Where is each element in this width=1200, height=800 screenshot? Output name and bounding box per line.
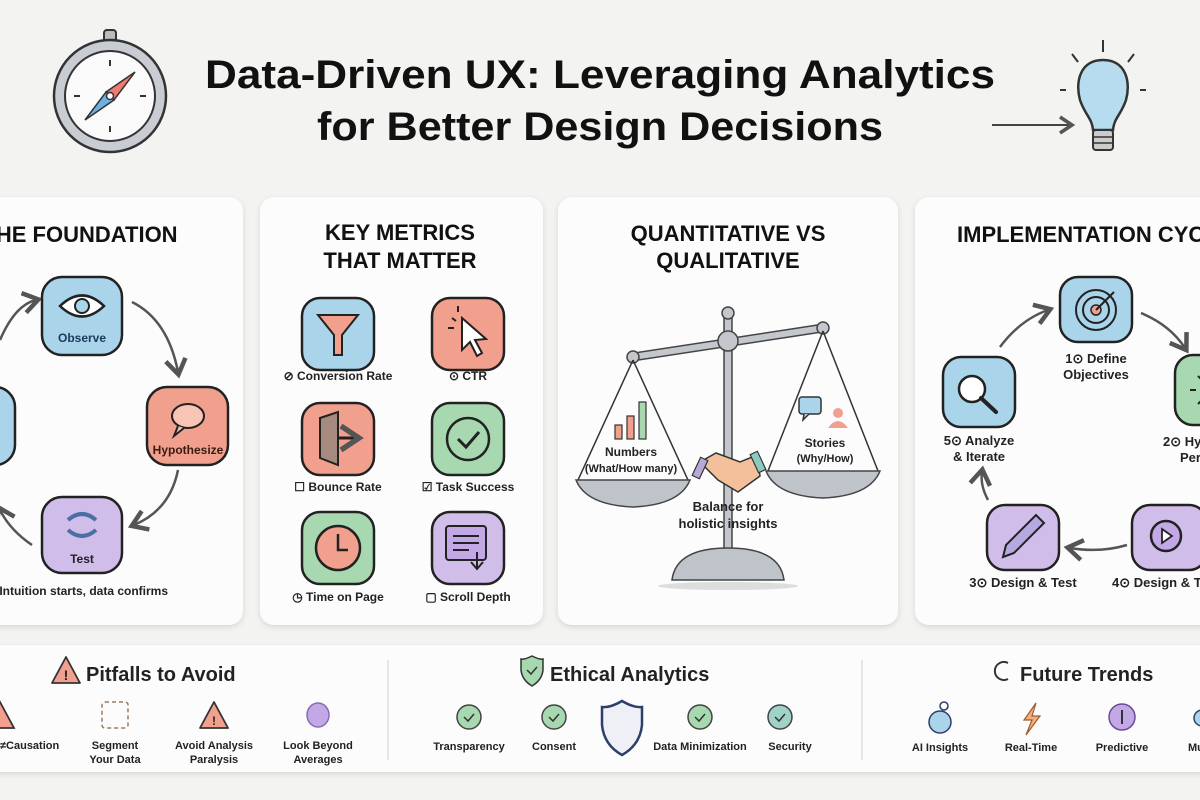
item: predictive [1096, 704, 1148, 754]
item: transparency: Transparency [433, 741, 506, 753]
metric: scroll depth: ▢ Scroll Depth [425, 590, 511, 604]
item: paralysis [175, 702, 253, 766]
chart: balance scale [576, 307, 880, 590]
text: numbers: (What/How many) [585, 463, 677, 475]
item: averages: Averages [293, 754, 343, 766]
item: paralysis: Avoid Analysis [175, 740, 253, 752]
step 5: analyze: 5⊙ Analyze [944, 433, 1014, 448]
arrow: to bulb [992, 124, 1070, 126]
metric: bounce rate [294, 403, 382, 494]
item: correlation [0, 702, 59, 752]
step 2: hypothesis [1163, 355, 1200, 465]
item: segment: Segment [92, 740, 139, 752]
title: for Better Design Decisions [317, 105, 883, 149]
step 1: define objectives [1060, 277, 1132, 382]
item: paralysis: Paralysis [190, 754, 238, 766]
text: stories: Stories [805, 436, 846, 450]
panel: the foundation [0, 197, 243, 625]
item: security [768, 705, 813, 753]
icon: bar chart [615, 402, 646, 439]
heading: ethical [521, 656, 709, 686]
text: balance: holistic insights [679, 516, 777, 531]
step 5: analyze [943, 357, 1015, 464]
section: future trends [912, 662, 1200, 754]
item: averages [283, 703, 353, 766]
item: real-time [1005, 703, 1057, 754]
item: data minimization [653, 705, 747, 753]
item: ai insights [912, 702, 968, 754]
section: pitfalls [0, 657, 353, 766]
panel: quantitative vs qualitative [558, 197, 898, 625]
heading: pitfalls: Pitfalls to Avoid [86, 664, 236, 686]
icon: compass [54, 30, 166, 152]
text: stories: (Why/How) [797, 453, 854, 465]
icon: observe [42, 277, 122, 355]
step 3: design & test: 3⊙ Design & Test [969, 575, 1077, 590]
arrows: cycle [0, 300, 178, 545]
metric: time on page [292, 512, 384, 604]
heading: quant vs qual: QUANTITATIVE VS [631, 221, 825, 246]
caption: foundation: Intuition starts, data confirms [0, 584, 168, 598]
icon: chat and person [799, 397, 848, 428]
section: ethical analytics [433, 656, 813, 755]
heading: quant vs qual: QUALITATIVE [656, 248, 800, 273]
item: consent: Consent [532, 741, 576, 753]
metric: conversion rate: ⊘ Conversion Rate [284, 369, 393, 383]
heading: key metrics [323, 220, 477, 273]
item: consent [532, 705, 576, 753]
metric: conversion rate [284, 298, 393, 383]
metric: ctr: ⊙ CTR [449, 369, 487, 383]
icon: test [42, 497, 122, 573]
heading: pitfalls [52, 657, 236, 686]
metric: scroll depth [425, 512, 511, 604]
heading: key metrics: THAT MATTER [323, 248, 477, 273]
metric: task success [422, 403, 515, 494]
item: real-time: Real-Time [1005, 742, 1057, 754]
text: balance [679, 499, 777, 531]
text: numbers [585, 445, 677, 475]
heading: ethical: Ethical Analytics [550, 664, 709, 686]
icon: hypothesize [147, 387, 228, 465]
heading: quant vs qual [631, 221, 825, 273]
icon: shield [602, 701, 642, 755]
step 1: define objectives: 1⊙ Define [1065, 351, 1127, 366]
panel: bottom strip [0, 645, 1200, 772]
icon: left box (partial) [0, 387, 15, 465]
item: predictive: Predictive [1096, 742, 1148, 754]
step 4: design & test [1112, 505, 1200, 590]
item: averages: Look Beyond [283, 740, 353, 752]
metric: task success: ☑ Task Success [422, 480, 515, 494]
panel: key metrics [260, 197, 543, 625]
item: segment: Your Data [89, 754, 141, 766]
item: ai insights: AI Insights [912, 742, 968, 754]
heading: pitfalls: ! [64, 667, 68, 683]
metric: time on page: ◷ Time on Page [292, 590, 384, 604]
icon: test: Test [70, 552, 94, 566]
item: multi (partial) [1188, 710, 1200, 754]
item: transparency [433, 705, 506, 753]
text: balance: Balance for [693, 499, 763, 514]
icon: observe: Observe [58, 331, 106, 345]
item: correlation: ≠Causation [0, 740, 59, 752]
text: numbers: Numbers [605, 445, 657, 459]
step 5: analyze: & Iterate [953, 449, 1005, 464]
text: stories [797, 436, 854, 465]
step 3: design & test [969, 505, 1077, 590]
heading: key metrics: KEY METRICS [325, 220, 475, 245]
item: segment [89, 702, 141, 766]
metric: bounce rate: ☐ Bounce Rate [294, 480, 382, 494]
item: security: Security [768, 741, 813, 753]
title: Data-Driven UX: Leveraging Analytics [205, 53, 995, 97]
arrows: cycle [982, 310, 1185, 550]
metric: ctr [432, 298, 504, 383]
title [205, 53, 995, 149]
icon: handshake [692, 451, 766, 492]
item: paralysis: ! [212, 714, 216, 728]
heading: future trends: Future Trends [1020, 664, 1153, 686]
icon: hypothesize: Hypothesize [153, 443, 224, 457]
panel: implementation cycle [915, 197, 1200, 625]
item: data minimization: Data Minimization [653, 741, 747, 753]
step 1: define objectives: Objectives [1063, 367, 1129, 382]
icon: light bulb [1060, 40, 1146, 150]
